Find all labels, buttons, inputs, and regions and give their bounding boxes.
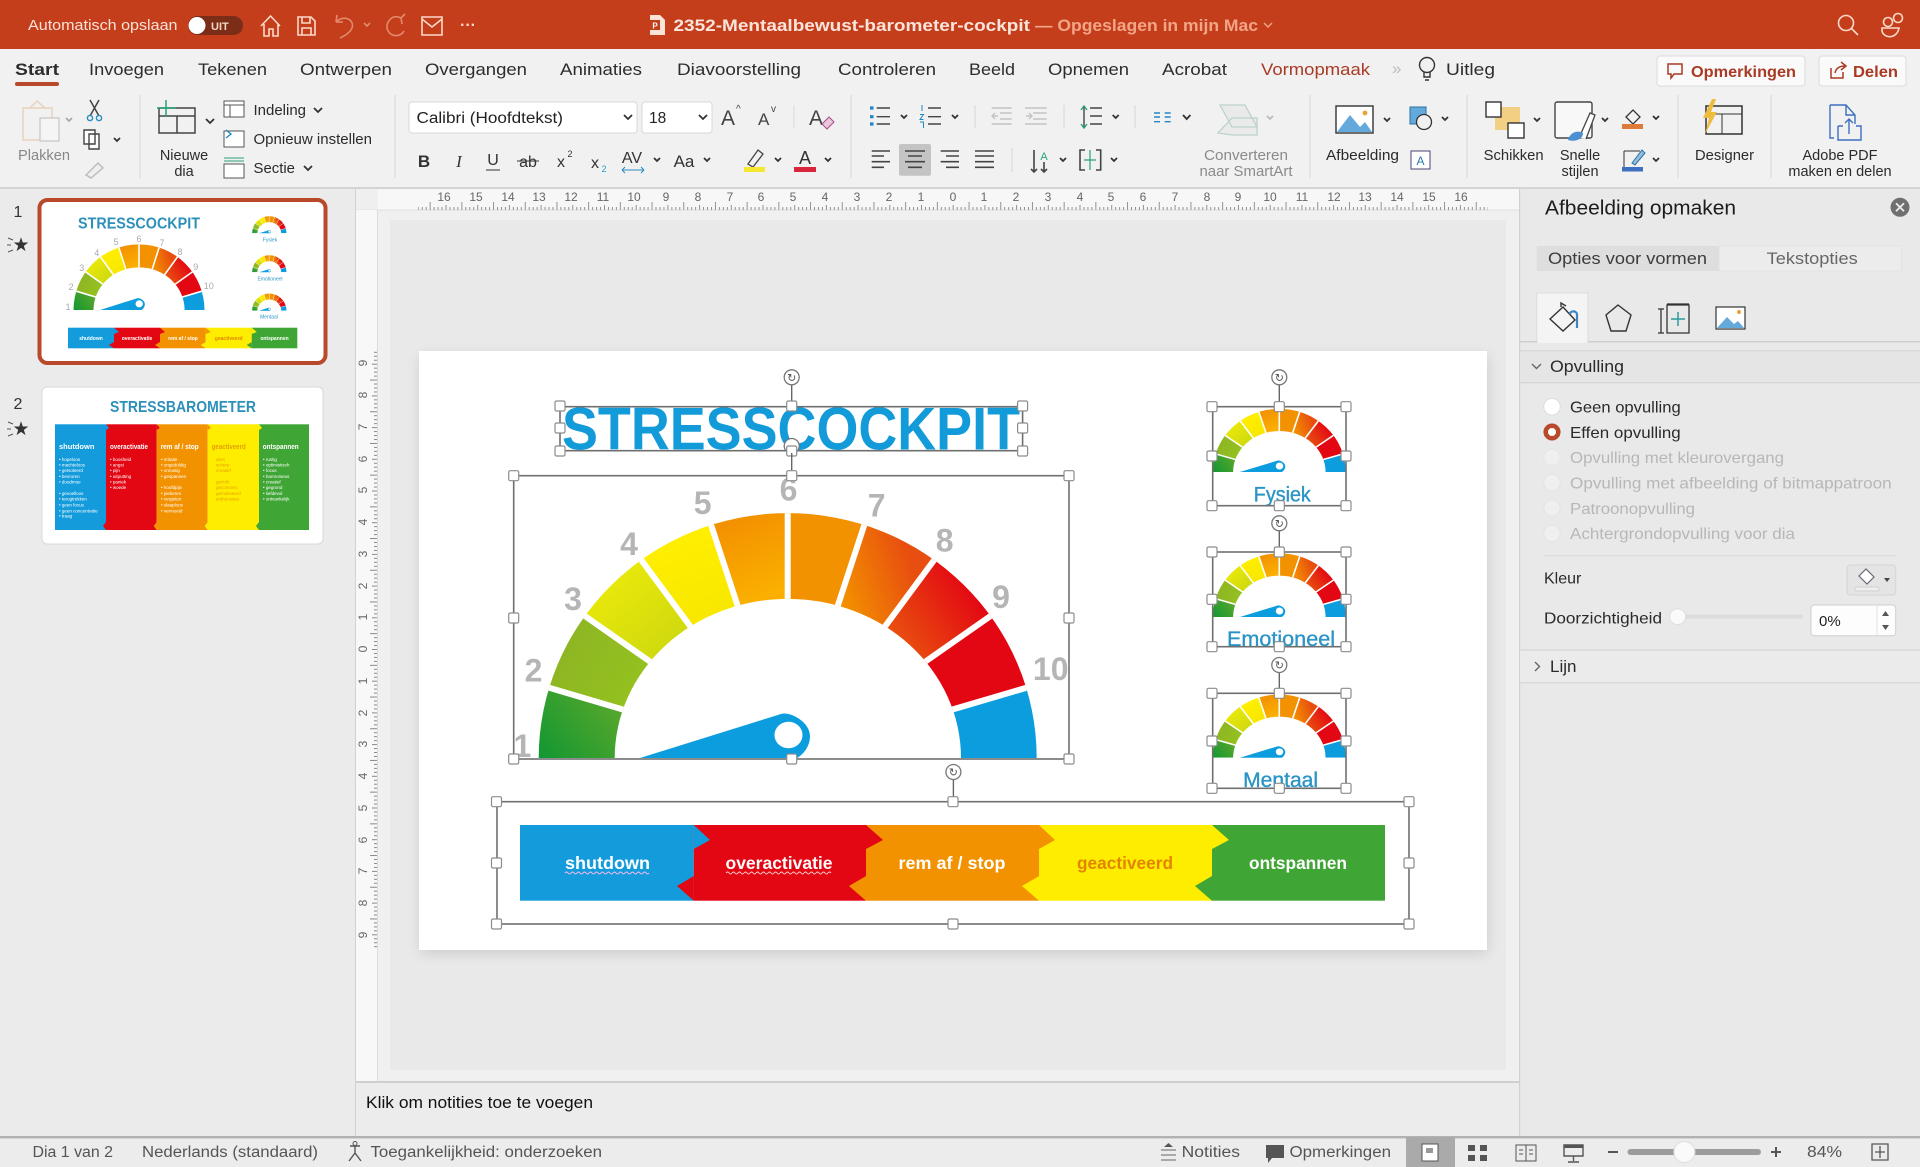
horizontal ruler: 5 (1108, 190, 1115, 204)
vertical ruler: 7 (356, 867, 370, 874)
notes pane (356, 1081, 1520, 1137)
thumbnail 2 slide (42, 387, 323, 544)
fill radio options: Achtergrondopvulling voor dia (1570, 526, 1795, 543)
thumbnail 2 column: ontspannen: • rustig (263, 457, 277, 462)
vertical ruler: 4 (356, 772, 370, 779)
zoom percent: 84% (1807, 1144, 1842, 1161)
font size and clear format icons: ^ (736, 104, 741, 115)
vertical ruler: 5 (356, 486, 370, 493)
vertical ruler: 1 (356, 677, 370, 684)
status bar (0, 1136, 1920, 1167)
segment: ontspannen: ontspannen (1249, 853, 1347, 873)
gauge selection frame (509, 453, 1074, 764)
tab: Start: Start (15, 60, 59, 79)
gauge scale numbers: 6 (780, 472, 797, 508)
gauge scale numbers: 1 (514, 728, 531, 764)
vertical ruler: 0 (356, 645, 370, 652)
zoom slider (1608, 1142, 1781, 1162)
vertical ruler: 7 (356, 423, 370, 430)
ribbon tabs: » (1392, 59, 1401, 78)
fill radio options: Patroonopvulling (1570, 501, 1695, 518)
thumbnail 2 column: overactivatie: • pijn (110, 468, 120, 473)
ribbon tabs: Opnemen (1048, 60, 1129, 79)
text format row: A (799, 148, 811, 168)
thumbnail 2 column: rem af / stop: • vergeten (161, 497, 182, 502)
clipboard group (18, 100, 120, 178)
section: Lijn header (1520, 650, 1920, 683)
section: Opvulling header (1520, 351, 1920, 383)
small gauge: Mentaal: ↻ (1275, 660, 1284, 672)
thumbnail 2 column: rem af / stop: • vermoeid (161, 508, 183, 513)
ruler corner (356, 189, 378, 210)
thumbnail 2 column: geactiveerd: gemotiveerd (216, 491, 241, 496)
thumbnail 2 column: rem af / stop: • piekeren (161, 491, 182, 496)
picture button (1326, 106, 1448, 169)
vertical ruler: 4 (356, 518, 370, 525)
text format row: ab (519, 154, 537, 171)
segment: shutdown: shutdown (565, 853, 650, 873)
thumbnail 2 column: geactiveerd (205, 424, 259, 530)
slide layout commands: Sectie (254, 161, 295, 177)
horizontal ruler: 14 (1390, 190, 1404, 204)
designer button (1695, 99, 1754, 164)
ribbon tabs: Controleren (838, 60, 936, 79)
vertical ruler: 2 (356, 582, 370, 589)
thumbnail 2 column: shutdown (55, 424, 106, 530)
view buttons (1406, 1137, 1583, 1167)
thumbnail 1 star: ★ (12, 235, 30, 256)
colour control: Kleur (1544, 570, 1582, 588)
thumbnail 2 column: overactivatie: • uitputting (110, 474, 132, 479)
horizontal ruler: 3 (854, 190, 861, 204)
horizontal ruler: 11 (1296, 190, 1309, 204)
save state chevron (1264, 23, 1272, 27)
thumbnail 1 gauge numbers: 7 (159, 238, 165, 248)
search icon (1838, 16, 1858, 35)
main gauge (488, 453, 1088, 764)
state bar (492, 764, 1414, 929)
gauge scale numbers: 4 (620, 526, 638, 562)
horizontal ruler: 2 (886, 190, 893, 204)
thumbnail 1 state bar: overactivatie (122, 336, 153, 342)
arrange and quick styles (1484, 102, 1659, 180)
thumbnail 1 state bar: geactiveerd (215, 336, 243, 342)
button: Delen (1819, 56, 1906, 86)
slide canvas (378, 211, 1519, 1081)
font size and clear format icons (721, 104, 834, 130)
alignment icons: A (1040, 151, 1048, 163)
gauge scale numbers: 5 (694, 485, 712, 521)
thumbnail 1 small gauges: Fysiek (263, 238, 278, 244)
vertical ruler: 3 (356, 740, 370, 747)
thumbnail 1 gauge numbers: 6 (136, 234, 142, 244)
horizontal ruler: 16 (437, 190, 451, 204)
thumbnail 1 main gauge (60, 230, 218, 310)
adobe pdf button: maken en delen (1788, 164, 1892, 180)
small gauge: Emotioneel: Emotioneel (1227, 628, 1335, 651)
vertical ruler: 8 (356, 899, 370, 906)
comments toggle (1266, 1144, 1391, 1163)
vertical ruler: 2 (356, 709, 370, 716)
thumbnail 2 column: rem af / stop: • hoofdpijn (161, 485, 183, 490)
ribbon tabs: Overgangen (425, 60, 527, 79)
gauge scale numbers: 8 (936, 523, 954, 559)
vertical ruler: 6 (356, 455, 370, 462)
lightbulb icon (1420, 58, 1434, 80)
horizontal ruler: 3 (1045, 190, 1052, 204)
slide shadow (421, 356, 1487, 953)
convert to SmartArt: naar SmartArt (1200, 164, 1292, 180)
thumbnail 2 column: ontspannen: • harmonieus (263, 474, 290, 479)
font size dropdown: 18 (649, 110, 666, 127)
vertical ruler: 9 (356, 931, 370, 938)
thumbnail 1 gauge numbers: 5 (113, 237, 119, 247)
thumbnail 2 column: geactiveerd: geactiveerd (212, 442, 246, 451)
ribbon group dividers (140, 95, 1771, 178)
gauge scale numbers: 10 (1033, 651, 1068, 687)
autosave toggle: UIT (211, 21, 229, 33)
gauge scale numbers: 9 (992, 579, 1010, 615)
segment: geactiveerd (1022, 825, 1212, 901)
transparency control: 0% (1819, 613, 1841, 630)
option tabs: Opties voor vormen (1548, 250, 1707, 268)
transparency control: Doorzichtigheid (1544, 610, 1662, 628)
vertical ruler: 6 (356, 836, 370, 843)
thumbnail 2 column: rem af / stop: rem af / stop (161, 442, 199, 451)
horizontal ruler: 1 (981, 190, 988, 204)
small gauge: Fysiek (1199, 370, 1359, 511)
thumbnail 2 column: rem af / stop: • slaaploos (161, 503, 184, 508)
thumbnail 2 column: geactiveerd: scherp (216, 463, 230, 468)
ribbon tabs: Acrobat (1162, 60, 1227, 79)
text format row: 2 (601, 164, 607, 174)
horizontal ruler: 8 (695, 190, 702, 204)
thumbnail 2 column: shutdown: • hopeloos (59, 457, 81, 462)
text format row: B (418, 152, 430, 171)
thumbnail 2 column: geactiveerd: gericht (216, 479, 230, 484)
thumbnail 1 gauge numbers: 3 (79, 263, 84, 273)
thumbnail 1 small gauges (249, 212, 290, 320)
thumbnail 1 state bar: shutdown (79, 336, 103, 342)
text format row (418, 148, 831, 174)
thumbnail 2 column: ontspannen: • focus (263, 468, 277, 473)
panel icon tabs (1520, 293, 1920, 343)
picture button: A (1416, 154, 1425, 168)
horizontal ruler: 0 (950, 190, 957, 204)
fill radio options (1544, 398, 1892, 543)
alignment icons (872, 144, 1117, 176)
designer button: Designer (1695, 148, 1754, 164)
arrange and quick styles: Snelle (1560, 148, 1600, 164)
fill radio options: Effen opvulling (1570, 425, 1681, 442)
more icon: ··· (460, 17, 476, 34)
thumbnail 1 gauge numbers: 2 (68, 282, 74, 292)
convert to SmartArt (1200, 105, 1292, 180)
thumbnail 2 column: geactiveerd: geconcent. (216, 485, 238, 490)
thumbnail 2 column: overactivatie: • angst (110, 463, 125, 468)
new slide button: Nieuwe (160, 148, 208, 164)
thumbnail 2 column: shutdown: • terugtrekken (59, 497, 87, 502)
slide layout commands (224, 101, 372, 178)
thumbnail 2 column: shutdown: • doodmoe (59, 479, 81, 484)
fill radio options: Opvulling met afbeelding of bitmappatroon (1570, 476, 1892, 492)
colour control (1544, 565, 1896, 595)
thumbnail 2 column: ontspannen: • liefdevol (263, 491, 282, 496)
small gauge: Mentaal (1199, 658, 1359, 793)
thumbnail 2 column: overactivatie (103, 424, 157, 530)
arrange and quick styles: stijlen (1561, 164, 1599, 180)
thumbnail 1 gauge numbers: 8 (177, 247, 183, 257)
ribbon (0, 49, 1920, 189)
thumbnail 2 column: overactivatie: • boosheid (110, 457, 132, 462)
save state: — Opgeslagen in mijn Mac (1035, 17, 1258, 35)
fit to window (1872, 1144, 1888, 1160)
notes toggle: Notities (1182, 1144, 1240, 1161)
horizontal ruler: 15 (1422, 190, 1436, 204)
thumbnail 2 column: shutdown: • geïsoleerd (59, 468, 83, 473)
slide (419, 351, 1487, 950)
thumbnail 2 title: STRESSBAROMETER (110, 399, 256, 416)
transparency control (1544, 605, 1896, 636)
horizontal ruler: 13 (532, 190, 546, 204)
horizontal ruler: 8 (1204, 190, 1211, 204)
thumbnail 1 gauge numbers: 10 (204, 281, 214, 291)
thumbnail 2 column: shutdown: • machteloos (59, 463, 86, 468)
close button (1890, 198, 1910, 217)
thumbnail 2 column: overactivatie: overactivatie (110, 442, 148, 451)
arrange and quick styles: Schikken (1484, 148, 1544, 164)
gauge scale numbers: 2 (525, 653, 542, 689)
thumbnail 2 column: rem af / stop: • gespannen (161, 474, 187, 479)
horizontal ruler: 6 (1140, 190, 1147, 204)
segment: geactiveerd: geactiveerd (1077, 853, 1173, 873)
vertical ruler: 5 (356, 804, 370, 811)
text format row: 2 (567, 149, 573, 159)
gauge scale numbers (514, 472, 1068, 764)
thumbnail 2 column: ontspannen: • ontvankelijk (263, 497, 290, 502)
horizontal ruler: 5 (790, 190, 797, 204)
thumbnail 1 title: STRESSCOCKPIT (78, 216, 200, 232)
font size and clear format icons: A (758, 110, 770, 129)
slide counter: Dia 1 van 2 (32, 1144, 113, 1161)
language: Nederlands (standaard) (142, 1144, 318, 1161)
thumbnail 1 number: 1 (14, 204, 23, 221)
thumbnail 2 number: 2 (14, 396, 23, 413)
thumbnail 1 small gauges: Mentaal (260, 314, 278, 320)
segment: shutdown (520, 825, 694, 901)
fill radio options: Geen opvulling (1570, 400, 1681, 416)
thumbnail 1 state bar: ontspannen (260, 336, 289, 342)
format picture panel (1519, 189, 1920, 1137)
thumbnail 2 column: rem af / stop: • irritatie (161, 457, 178, 462)
horizontal ruler: 14 (501, 190, 515, 204)
text format row: U (487, 152, 499, 169)
thumbnail 2 column: shutdown: • gevoelloos (59, 491, 84, 496)
thumbnail 2 column: geactiveerd: creatief (216, 468, 232, 473)
horizontal ruler: 2 (1013, 190, 1020, 204)
ribbon tabs: Uitleg (1446, 60, 1495, 79)
button: Opmerkingen (1657, 56, 1805, 86)
small gauge: Emotioneel: ↻ (1275, 518, 1284, 530)
horizontal ruler: 10 (627, 190, 641, 204)
vertical ruler: 8 (356, 391, 370, 398)
thumbnail 2 column: rem af / stop (154, 424, 208, 530)
horizontal ruler: 6 (758, 190, 765, 204)
small gauge: Fysiek: Fysiek (1254, 484, 1311, 507)
thumbnail 1 state bar: rem af / stop (168, 336, 198, 342)
gauge scale numbers: 3 (564, 581, 582, 617)
option tabs (1537, 246, 1902, 271)
document title: 2352-Mentaalbewust-barometer-cockpit (674, 17, 1031, 35)
bar selection frame (492, 764, 1414, 929)
autosave label: Automatisch opslaan (28, 18, 178, 34)
thumbnail 2 column: ontspannen: • optimistisch (263, 463, 290, 468)
horizontal ruler: 13 (1358, 190, 1372, 204)
thumbnail 2 column: ontspannen: ontspannen (263, 442, 299, 451)
thumbnail 2 star: ★ (12, 419, 30, 440)
thumbnail 2 column: shutdown: • geen focus (59, 503, 85, 508)
horizontal ruler: 9 (1235, 190, 1242, 204)
autosave toggle (188, 16, 243, 35)
font name dropdown: Calibri (Hoofdtekst) (416, 110, 563, 127)
vertical ruler: 9 (356, 359, 370, 366)
document icon: P (652, 22, 658, 30)
slide thumbnails pane (0, 189, 356, 1137)
thumbnail 1 small gauges: Emotioneel (257, 276, 283, 282)
button: Opmerkingen: Opmerkingen (1691, 64, 1796, 81)
thumbnail 2 column: shutdown: • traag (59, 514, 73, 519)
segment: rem af / stop (849, 825, 1039, 901)
convert to SmartArt: Converteren (1204, 148, 1288, 164)
ribbon tabs: Tekenen (198, 60, 267, 79)
slide layout commands: Opnieuw instellen (254, 132, 372, 148)
text format row: x (591, 155, 599, 172)
horizontal ruler: 7 (727, 190, 734, 204)
picture button: Afbeelding (1326, 148, 1399, 164)
heading: STRESSCOCKPIT: ↻ (787, 372, 796, 384)
ribbon tabs (89, 59, 1495, 79)
clipboard group: Plakken (18, 148, 70, 164)
horizontal ruler: 11 (597, 190, 610, 204)
font size and clear format icons: A (809, 107, 823, 130)
ribbon tabs: Invoegen (89, 60, 164, 79)
segment: overactivatie (677, 825, 866, 901)
thumbnail 2 column: overactivatie: • paniek (110, 479, 127, 484)
thumbnail 2 column: rem af / stop: • ongeduldig (161, 463, 186, 468)
font size and clear format icons: A (721, 107, 735, 130)
text format row: Aa (674, 152, 695, 171)
font size dropdown (642, 102, 712, 133)
horizontal ruler: 10 (1263, 190, 1277, 204)
notes toggle (1161, 1143, 1240, 1161)
thumbnail 2 column: ontspannen: • creatief (263, 479, 281, 484)
text format row: I (455, 152, 463, 171)
thumbnail 2 column: shutdown: shutdown (59, 442, 95, 451)
slide layout commands: Indeling (254, 103, 306, 119)
thumbnail 2 column: shutdown: • bevroren (59, 474, 80, 479)
section: Opvulling header: Opvulling (1550, 357, 1624, 376)
heading: STRESSCOCKPIT (555, 370, 1028, 462)
title bar (0, 0, 1920, 49)
small gauge: Mentaal: Mentaal (1243, 769, 1318, 792)
horizontal ruler: 9 (663, 190, 670, 204)
horizontal ruler: 12 (1327, 190, 1341, 204)
vertical ruler: 1 (356, 613, 370, 620)
thumbnail 1 gauge numbers (65, 234, 214, 312)
thumbnail 2 column: shutdown: • geen concentratie (59, 508, 98, 513)
thumbnail 1 slide (40, 200, 326, 363)
thumbnail 1 gauge numbers: 4 (94, 248, 99, 258)
segment: rem af / stop: rem af / stop (898, 853, 1006, 873)
horizontal ruler: 12 (564, 190, 578, 204)
font size and clear format icons: v (771, 104, 776, 115)
gauge scale numbers: 7 (868, 488, 886, 524)
thumbnail 1 gauge numbers: 1 (65, 302, 71, 312)
vertical ruler (356, 210, 378, 1081)
text format row: x (557, 154, 565, 171)
thumbnail 1 gauge numbers: 9 (193, 262, 198, 272)
horizontal ruler: 4 (1077, 190, 1084, 204)
button: Delen: Delen (1853, 64, 1898, 81)
segment: overactivatie: overactivatie (726, 853, 833, 873)
notes pane: Klik om notities toe te voegen (366, 1094, 593, 1112)
accessibility: Toegankelijkheid: onderzoeken (370, 1144, 602, 1161)
horizontal ruler: 1 (918, 190, 925, 204)
thumbnail 1 state bar (68, 328, 297, 348)
list icons (870, 105, 1190, 128)
comments toggle: Opmerkingen (1290, 1144, 1391, 1161)
font name dropdown (409, 102, 637, 133)
adobe pdf button (1788, 105, 1892, 180)
heading: STRESSCOCKPIT: STRESSCOCKPIT (562, 396, 1020, 462)
horizontal ruler: 7 (1172, 190, 1179, 204)
tab: Start (15, 60, 59, 86)
thumbnail 2 column: ontspannen (256, 424, 309, 530)
text format row: AV (622, 150, 642, 167)
ribbon tabs: Ontwerpen (300, 60, 392, 79)
thumbnail 2 column: overactivatie: • woede (110, 485, 127, 490)
section: Lijn header: Lijn (1550, 657, 1576, 676)
horizontal ruler (356, 189, 1520, 211)
vertical ruler: 3 (356, 550, 370, 557)
small gauge: Emotioneel (1199, 516, 1359, 652)
horizontal ruler: 15 (469, 190, 483, 204)
thumbnail 2 column: rem af / stop: • onrustig (161, 468, 180, 473)
horizontal ruler: 4 (822, 190, 829, 204)
ribbon tabs: Diavoorstelling (677, 60, 801, 79)
thumbnail 2 column: geactiveerd: enthousiast (216, 497, 240, 502)
horizontal ruler: 16 (1454, 190, 1468, 204)
new slide button (157, 100, 214, 180)
bar selection frame: ↻ (949, 767, 958, 779)
ribbon tabs: Beeld (969, 60, 1015, 79)
option tabs: Tekstopties (1767, 250, 1858, 268)
fill radio options: Opvulling met kleurovergang (1570, 450, 1784, 467)
thumbnail 2 column: ontspannen: • gegrond (263, 485, 283, 490)
small gauge: Fysiek: ↻ (1275, 372, 1284, 384)
thumbnail 2 column: geactiveerd: alert (216, 457, 226, 462)
new slide button: dia (174, 164, 195, 180)
document icon (650, 15, 665, 35)
ribbon tabs: Animaties (560, 60, 642, 79)
ribbon tabs: Vormopmaak (1261, 60, 1371, 79)
panel heading: Afbeelding opmaken (1545, 198, 1736, 220)
segment: ontspannen (1195, 825, 1385, 901)
quick access icons (261, 14, 442, 38)
adobe pdf button: Adobe PDF (1803, 148, 1878, 164)
people icon (1882, 14, 1902, 37)
